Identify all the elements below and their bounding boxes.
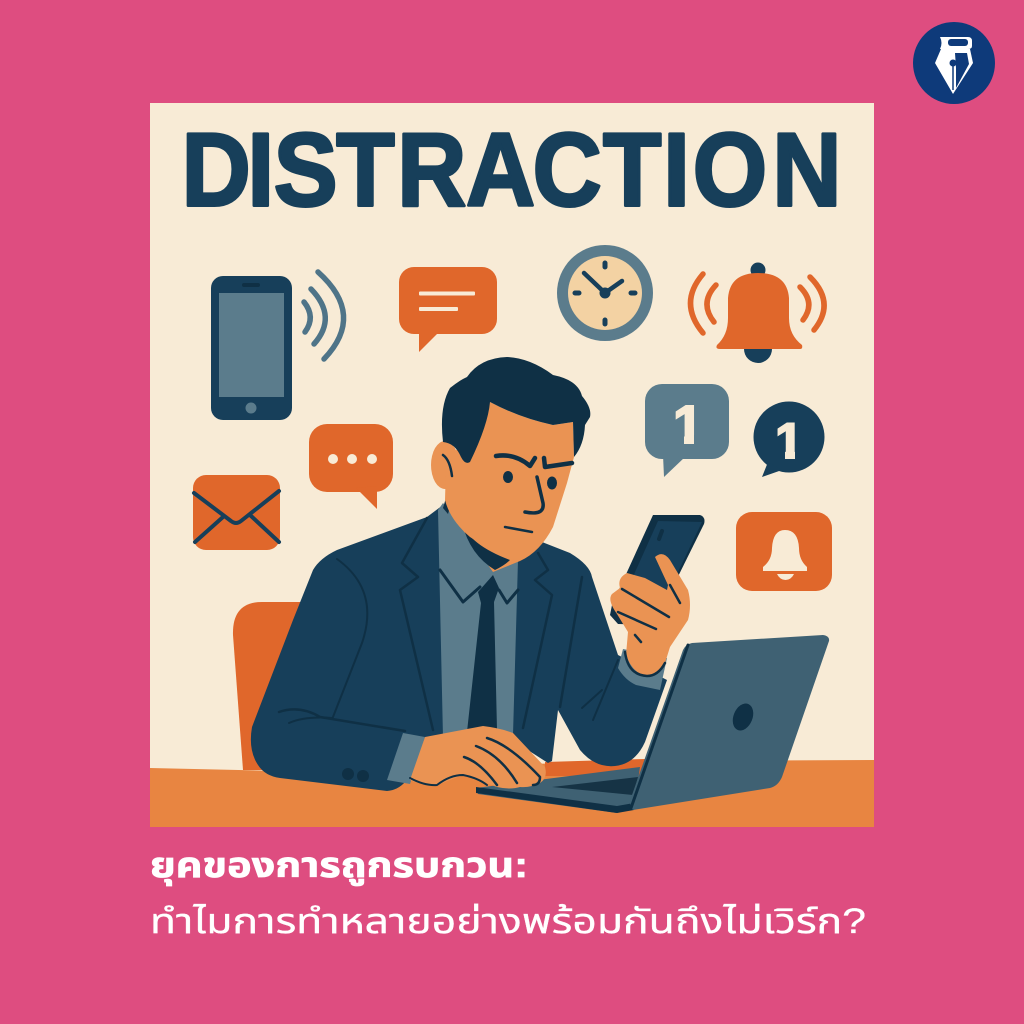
- man: [251, 357, 829, 813]
- icon: notification badge slate: 1: [673, 395, 703, 455]
- right cuff: [618, 649, 667, 690]
- icon: notification badge navy: 1: [775, 413, 803, 469]
- title: DISTRACTION: [182, 113, 841, 228]
- icon: pen nib logo: [913, 22, 995, 104]
- jacket seams: [279, 518, 618, 782]
- chair: [233, 602, 302, 770]
- left cuff: [387, 733, 425, 784]
- neck: [445, 505, 520, 572]
- hand holding phone: [610, 554, 690, 676]
- caption line 2: ทำไมการทำหลายอย่างพร้อมกันถึงไม่เวิร์ก?: [150, 902, 866, 941]
- icon: notification badge navy: [754, 402, 824, 477]
- icon: ringing alarm bell: [690, 262, 824, 363]
- ear: [431, 441, 459, 489]
- icon: message bubble: [399, 267, 497, 352]
- held phone: [610, 515, 704, 625]
- icon: ringing phone: [211, 272, 344, 420]
- icon: envelope: [193, 475, 280, 550]
- icon: clock: [557, 245, 653, 341]
- caption line 1: ยุคของการถูกรบกวน:: [150, 846, 528, 886]
- dark behind neck: [443, 490, 455, 514]
- face: [445, 402, 574, 561]
- collar lines: [440, 570, 518, 603]
- face details: [443, 455, 572, 532]
- table: [150, 760, 874, 827]
- icon: notification badge slate: [645, 384, 729, 477]
- hand on laptop: [410, 726, 546, 788]
- desk shadow strip: [545, 759, 645, 776]
- hair: [442, 357, 590, 463]
- caption: [150, 846, 866, 941]
- laptop: [476, 635, 829, 813]
- jacket: [251, 505, 667, 791]
- icon: bell app tile: [736, 512, 832, 591]
- icon: typing bubble: [309, 424, 393, 509]
- shirt: [438, 503, 520, 738]
- tie: [467, 575, 499, 732]
- panel: illustration: [150, 103, 874, 827]
